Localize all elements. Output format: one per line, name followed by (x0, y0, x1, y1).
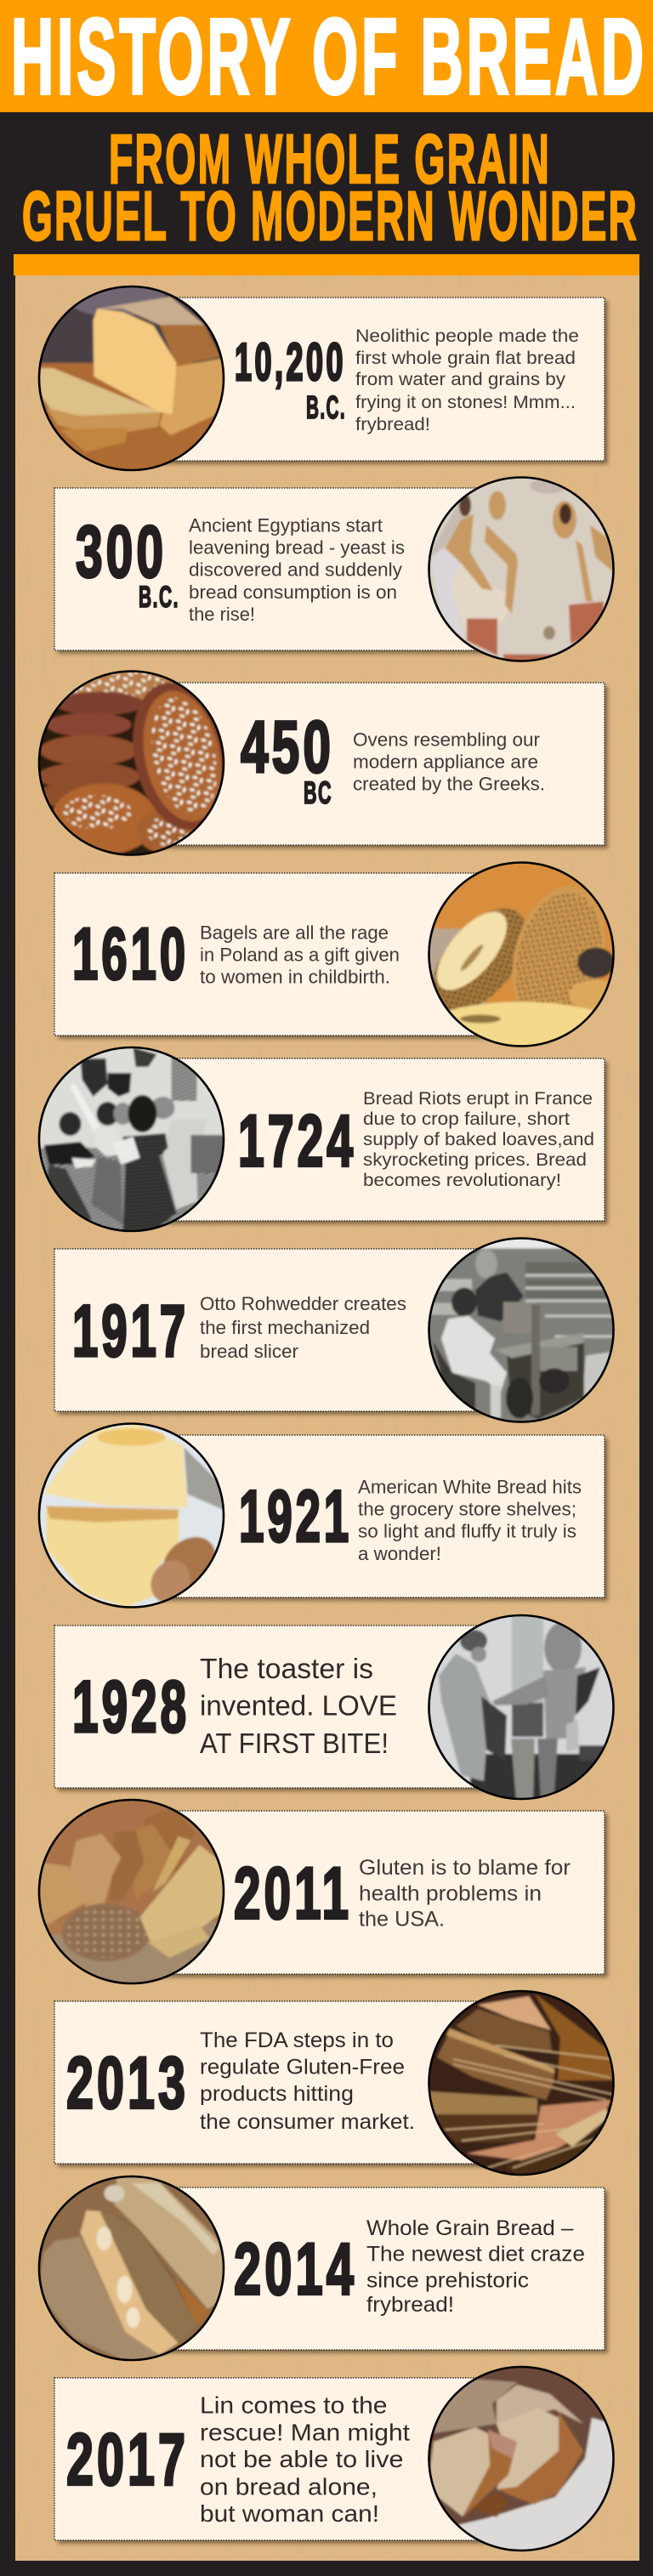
description: Otto Rohwedder creates (200, 1293, 406, 1314)
description: the consumer market. (200, 2110, 415, 2134)
event: 2014 (36, 2173, 608, 2363)
event: 2013 (54, 1988, 616, 2178)
description (200, 2392, 410, 2527)
year: 2011 (234, 1853, 352, 1935)
description: supply of baked loaves,and (363, 1130, 594, 1149)
year: 1610 (72, 913, 189, 995)
year: 2013 (66, 2042, 189, 2124)
description: rescue! Man might (200, 2420, 410, 2445)
event: 2017 (54, 2363, 616, 2554)
description (189, 515, 405, 625)
photo: egyptian wall painting (426, 474, 616, 665)
description: modern appliance are (353, 752, 538, 772)
description (366, 2216, 585, 2317)
description: Whole Grain Bread – (366, 2216, 574, 2240)
description: Lin comes to the (200, 2392, 388, 2419)
year: 1921 (239, 1476, 352, 1558)
card (136, 1435, 608, 1601)
photo: toaster demonstration (426, 1612, 616, 1802)
event: 1928 (54, 1612, 616, 1802)
description: first whole grain flat bread (355, 348, 576, 368)
description (359, 1856, 571, 1932)
description: created by the Greeks. (353, 774, 545, 794)
description: bread slicer (200, 1341, 298, 1362)
header band (0, 0, 653, 116)
event: 10,200 B.C. (36, 270, 608, 474)
description: the grocery store shelves; (358, 1498, 576, 1520)
description: Neolithic people made the (355, 326, 579, 346)
description: discovered and suddenly (189, 559, 402, 580)
description: not be able to live (200, 2446, 403, 2472)
description (363, 1089, 594, 1190)
description: products hitting (200, 2082, 354, 2106)
year: B.C. (306, 390, 346, 426)
description: from water and grains by (355, 369, 565, 389)
year (76, 512, 179, 614)
year: BC (304, 775, 332, 810)
photo: white bread biscuits (36, 1420, 226, 1610)
card (54, 2001, 522, 2167)
description: so light and fluffy it truly is (358, 1520, 576, 1542)
card (54, 488, 522, 654)
card (136, 2187, 608, 2353)
orange bar (14, 254, 639, 275)
subtitle (22, 121, 639, 255)
card (136, 683, 608, 848)
photo: whole grain bread (36, 2173, 226, 2363)
description: since prehistoric (366, 2268, 529, 2292)
card (54, 2378, 522, 2544)
photo: dark loaf with wheat stalks (426, 1988, 616, 2178)
year: 2014 (234, 2229, 357, 2311)
year: 1917 (72, 1291, 189, 1372)
description: health problems in (359, 1882, 542, 1906)
event: 1724 (36, 1044, 608, 1234)
card (54, 1626, 522, 1791)
description: frybread! (366, 2293, 454, 2317)
year: 300 (76, 512, 167, 593)
description (358, 1476, 582, 1564)
year: 1724 (238, 1100, 356, 1182)
description: The newest diet craze (366, 2243, 585, 2267)
description: on bread alone, (200, 2474, 378, 2500)
description: bread consumption is on (189, 582, 397, 603)
description (200, 1653, 397, 1759)
description (200, 1293, 406, 1362)
description: a wonder! (358, 1543, 441, 1564)
description: the first mechanized (200, 1317, 370, 1338)
event: 1921 (36, 1420, 608, 1610)
photo: bread slicer machine (426, 1234, 616, 1425)
card (136, 1811, 608, 1977)
description (353, 729, 545, 794)
description: in Poland as a gift given (200, 945, 400, 966)
description: to women in childbirth. (200, 967, 390, 988)
card (136, 298, 608, 464)
card (136, 1058, 608, 1224)
card (54, 1249, 522, 1415)
photo: bread riot engraving (36, 1044, 226, 1234)
description (355, 326, 579, 434)
event: 1610 (54, 859, 623, 1059)
photo: sliced loaf (37, 286, 224, 471)
photo: bagels (428, 861, 615, 1047)
card (54, 873, 522, 1039)
description (200, 922, 400, 988)
event: 2011 (36, 1796, 608, 1987)
description: Ovens resembling our (353, 729, 540, 750)
description: becomes revolutionary! (363, 1171, 561, 1190)
description: the rise! (189, 604, 255, 625)
description: Bagels are all the rage (200, 922, 389, 944)
year: 10,200 (235, 333, 346, 392)
event: 450 BC (36, 656, 608, 859)
description: Bread Riots erupt in France (363, 1089, 593, 1109)
description: American White Bread hits (358, 1476, 582, 1498)
description: invented. LOVE (200, 1690, 397, 1721)
description: regulate Gluten-Free (200, 2056, 405, 2080)
description: AT FIRST BITE! (200, 1728, 389, 1759)
description: Gluten is to blame for (359, 1856, 571, 1880)
description: skyrocketing prices. Bread (363, 1150, 587, 1170)
year: B.C. (139, 581, 179, 614)
year: 1928 (72, 1666, 190, 1748)
description: but woman can! (200, 2500, 379, 2527)
year: 450 (241, 706, 334, 788)
description: leavening bread - yeast is (189, 537, 405, 558)
year (241, 706, 334, 810)
description: due to crop failure, short (363, 1109, 570, 1129)
year (235, 333, 346, 426)
description: The toaster is (200, 1653, 373, 1684)
photo: sliced rustic loaf on plate (426, 2363, 616, 2554)
description: Ancient Egyptians start (189, 515, 383, 536)
description: The FDA steps in to (200, 2028, 394, 2052)
event: 300 B.C. (54, 474, 616, 665)
photo: sliced bread and wheat (36, 1796, 226, 1987)
year: 2017 (66, 2420, 189, 2501)
description: the USA. (359, 1908, 445, 1932)
description (200, 2028, 415, 2134)
description: frybread! (355, 414, 430, 434)
description: frying it on stones! Mmm... (355, 392, 576, 412)
event: 1917 (54, 1234, 616, 1425)
photo: sesame cookies (37, 670, 224, 856)
